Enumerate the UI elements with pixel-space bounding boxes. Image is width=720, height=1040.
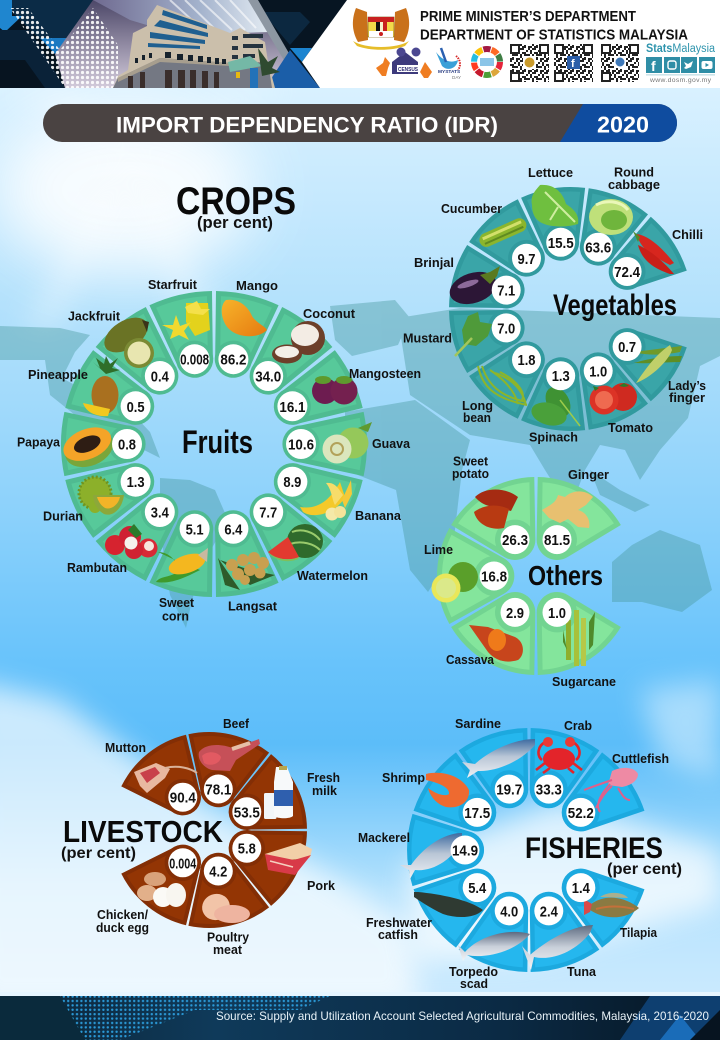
- numbers: fruits: 0.4: [151, 368, 169, 386]
- labels: fruits: Durian: [43, 509, 83, 524]
- labels: fruits: Papaya: [17, 435, 61, 450]
- labels: vegetables: Lady’s: [668, 378, 706, 393]
- labels: others: Lime: [424, 542, 453, 557]
- numbers: fruits: 3.4: [151, 504, 169, 522]
- numbers: fruits: 5.1: [186, 521, 204, 538]
- labels: vegetables: [403, 165, 706, 445]
- icon: cassava: [469, 625, 523, 662]
- labels: fisheries: scad: [460, 976, 488, 991]
- labels: fisheries: Cuttlefish: [612, 751, 669, 766]
- icon: guava: [322, 422, 372, 464]
- numbers: fisheries: 14.9: [452, 842, 478, 860]
- labels: vegetables: Spinach: [529, 430, 578, 445]
- icon: coconut: [272, 321, 325, 364]
- logo: mystats day: [436, 48, 461, 80]
- icon: catfish: [414, 892, 483, 917]
- icon: crab: [536, 737, 582, 773]
- icon: tuna: [522, 925, 593, 970]
- labels: vegetables: cabbage: [608, 177, 660, 192]
- numbers: vegetables: 0.7: [618, 339, 636, 356]
- header title text: DEPARTMENT OF STATISTICS MALAYSIA: [420, 26, 688, 44]
- labels: others: Cassava: [446, 652, 495, 667]
- icon: pork: [265, 843, 312, 875]
- labels: vegetables: Long: [462, 398, 493, 413]
- heading: fisheries: (per cent): [607, 861, 682, 878]
- numbers: others: 16.8: [481, 568, 507, 586]
- labels: fruits: [17, 277, 421, 624]
- title bar: 2020: [597, 112, 649, 138]
- icon: lettuce: [532, 185, 578, 226]
- labels: others: potato: [452, 466, 489, 481]
- logo: census: [376, 48, 432, 78]
- numbers: fisheries: 19.7: [496, 782, 522, 799]
- labels: fruits: Coconut: [303, 306, 356, 321]
- labels: fisheries: Freshwater: [366, 915, 432, 930]
- panel: livestock wheel: [61, 716, 340, 957]
- logo: mystats day: DAY: [452, 75, 461, 80]
- numbers: vegetables: [497, 235, 641, 385]
- icon: brinjal: [446, 266, 500, 310]
- icon: langsat: [218, 552, 275, 590]
- numbers: vegetables: 63.6: [585, 240, 611, 257]
- labels: fruits: Banana: [355, 508, 402, 523]
- header title text: PRIME MINISTER’S DEPARTMENT: [420, 8, 636, 25]
- labels: livestock: meat: [213, 942, 243, 957]
- icon: spinach: [529, 383, 580, 429]
- icon: mustard: [455, 312, 492, 356]
- numbers: livestock: 78.1: [205, 782, 231, 798]
- footer band: [0, 992, 720, 1040]
- labels: livestock: Fresh: [307, 770, 340, 785]
- numbers: fisheries: 1.4: [572, 880, 590, 897]
- panel: vegetables wheel: [403, 165, 706, 445]
- QR codes: f: [571, 58, 575, 70]
- numbers: fisheries: 33.3: [536, 782, 562, 799]
- StatsMalaysia social block: f: [651, 58, 656, 74]
- heading: crops: (per cent): [197, 214, 273, 232]
- labels: vegetables: bean: [463, 410, 491, 425]
- world map: [0, 300, 720, 628]
- header title text: [420, 8, 688, 44]
- numbers: livestock: 5.8: [238, 841, 256, 858]
- icon: cucumber: [477, 216, 529, 249]
- numbers: fisheries: 52.2: [568, 805, 594, 822]
- values: others: [480, 525, 572, 627]
- QR codes: [510, 44, 639, 82]
- numbers: vegetables: 7.1: [497, 283, 515, 300]
- icon: sweet corn: [156, 548, 208, 583]
- icon: cuttlefish: [584, 768, 638, 812]
- values: fruits: [112, 344, 316, 544]
- labels: vegetables: Cucumber: [441, 201, 502, 216]
- labels: fisheries: Tuna: [567, 964, 597, 979]
- icon: sweet potato: [474, 490, 518, 529]
- icon: fresh milk: [264, 766, 293, 819]
- numbers: fruits: 1.3: [127, 474, 145, 491]
- labels: fruits: Starfruit: [148, 277, 198, 292]
- StatsMalaysia social block: StatsMalaysia: [646, 43, 716, 55]
- labels: fruits: Langsat: [228, 599, 278, 614]
- labels: fisheries: catfish: [378, 927, 418, 942]
- numbers: livestock: 90.4: [170, 790, 196, 807]
- labels: fruits: Jackfruit: [68, 309, 121, 324]
- labels: fisheries: Sardine: [455, 716, 501, 731]
- icon: lime: [432, 562, 478, 602]
- labels: vegetables: Brinjal: [414, 255, 454, 270]
- values: fisheries: [450, 775, 595, 925]
- labels: livestock: duck egg: [96, 920, 149, 935]
- labels: fisheries: Shrimp: [382, 770, 425, 785]
- logo: census: CENSUS: [398, 67, 419, 73]
- numbers: fisheries: [452, 782, 594, 920]
- heading: crops: CROPS: [176, 180, 296, 223]
- heading: fruits: Fruits: [182, 424, 253, 460]
- icon: eggs: [137, 872, 186, 907]
- numbers: fisheries: 17.5: [464, 805, 490, 822]
- numbers: livestock: 0.004: [169, 855, 197, 872]
- numbers: fruits: 7.7: [259, 504, 277, 522]
- labels: vegetables: finger: [669, 390, 705, 405]
- heading: livestock: [61, 814, 224, 862]
- labels: fruits: Mangosteen: [349, 366, 421, 381]
- numbers: fruits: 16.1: [279, 399, 305, 416]
- heading: fisheries: FISHERIES: [525, 832, 663, 865]
- title bar: IMPORT DEPENDENCY RATIO (IDR): [116, 112, 498, 138]
- numbers: fruits: 6.4: [224, 521, 243, 538]
- numbers: fruits: [118, 352, 314, 538]
- labels: fruits: Watermelon: [297, 568, 368, 583]
- numbers: others: 1.0: [548, 605, 566, 622]
- header white panel: [302, 0, 720, 88]
- icon: mackerel: [400, 833, 462, 879]
- building photo: [113, 5, 280, 88]
- background clouds: [0, 680, 720, 1010]
- labels: others: [424, 454, 616, 689]
- labels: fruits: Rambutan: [67, 560, 127, 575]
- numbers: livestock: [169, 782, 260, 880]
- numbers: fruits: 86.2: [220, 352, 246, 369]
- logo: mystats day: MYSTATS: [438, 69, 461, 75]
- icon: torpedo scad: [458, 932, 530, 961]
- labels: livestock: Beef: [223, 716, 250, 731]
- values: vegetables: [492, 228, 642, 390]
- numbers: others: [481, 532, 570, 622]
- labels: fisheries: [358, 716, 669, 991]
- labels: vegetables: Tomato: [608, 420, 653, 435]
- numbers: vegetables: 1.3: [552, 368, 570, 385]
- labels: vegetables: Chilli: [672, 227, 703, 242]
- labels: livestock: Poultry: [207, 930, 250, 945]
- labels: fisheries: Mackerel: [358, 830, 410, 845]
- panel: others wheel: [424, 454, 627, 689]
- labels: livestock: Pork: [307, 878, 336, 893]
- numbers: livestock: 53.5: [234, 804, 260, 821]
- StatsMalaysia social block: [646, 43, 716, 84]
- source text: Source: Supply and Utilization Account Selected Agricultural Commodities, Malaysia, 2016-2020: [216, 1009, 709, 1023]
- numbers: others: 2.9: [506, 605, 524, 622]
- numbers: vegetables: 72.4: [614, 264, 641, 281]
- labels: livestock: Mutton: [105, 740, 146, 755]
- icon: starfruit: [162, 301, 210, 340]
- icon: poultry meat: [198, 890, 250, 924]
- icon: watermelon: [268, 524, 323, 561]
- labels: others: Sweet: [453, 454, 489, 469]
- labels: others: Sugarcane: [552, 674, 616, 689]
- labels: fisheries: Crab: [564, 718, 592, 733]
- values: livestock: [168, 774, 261, 886]
- icon: jackfruit: [98, 310, 154, 368]
- logo: SDG wheel: [474, 49, 500, 75]
- title bar: [43, 104, 677, 142]
- heading: vegetables: Vegetables: [553, 289, 677, 322]
- icon: rambutan: [105, 524, 158, 559]
- icon: cassava slice: [488, 629, 506, 651]
- numbers: vegetables: 7.0: [497, 320, 515, 337]
- icon: chilli: [633, 231, 674, 274]
- icon: long bean: [478, 366, 527, 405]
- panel: fisheries wheel: [358, 716, 682, 991]
- numbers: others: 81.5: [544, 532, 570, 549]
- icon: papaya: [58, 421, 119, 474]
- icon: sardine: [462, 739, 535, 778]
- labels: vegetables: Lettuce: [528, 165, 573, 180]
- icon: mangosteen: [312, 376, 358, 404]
- icon: mango: [222, 300, 267, 336]
- crest: coat of arms: [353, 3, 409, 50]
- icon: shrimp: [426, 773, 469, 807]
- labels: livestock: Chicken/: [97, 907, 148, 922]
- numbers: fruits: 8.9: [283, 474, 301, 491]
- numbers: fruits: 10.6: [288, 436, 314, 454]
- labels: fruits: corn: [162, 609, 189, 624]
- heading: livestock: LIVESTOCK: [63, 814, 224, 849]
- labels: fisheries: Tilapia: [620, 925, 658, 940]
- numbers: fisheries: 5.4: [468, 880, 487, 897]
- icon: sugarcane: [563, 610, 595, 666]
- numbers: vegetables: 1.8: [518, 352, 536, 369]
- numbers: vegetables: 15.5: [548, 235, 574, 252]
- labels: fruits: Guava: [372, 436, 411, 451]
- numbers: vegetables: 9.7: [518, 251, 536, 268]
- labels: vegetables: Mustard: [403, 331, 452, 346]
- numbers: livestock: 4.2: [209, 864, 227, 880]
- numbers: fruits: 34.0: [255, 368, 281, 386]
- numbers: fruits: 0.8: [118, 436, 136, 454]
- icon: durian: [79, 477, 124, 515]
- panel: fruits wheel: [17, 277, 421, 624]
- numbers: fruits: 0.008: [180, 352, 209, 369]
- numbers: fisheries: 2.4: [540, 903, 558, 920]
- numbers: fruits: 0.5: [127, 399, 145, 416]
- icon: lady's finger: [633, 345, 682, 383]
- icon: pineapple: [83, 356, 120, 416]
- icon: tomato: [590, 383, 637, 414]
- labels: livestock: [96, 716, 340, 957]
- labels: vegetables: Round: [614, 165, 654, 180]
- labels: livestock: milk: [312, 783, 338, 798]
- icon: ginger: [542, 491, 593, 528]
- icon: mutton: [134, 763, 197, 793]
- StatsMalaysia social block: www.dosm.gov.my: [649, 77, 712, 84]
- icon: banana: [300, 480, 352, 520]
- labels: fruits: Pineapple: [28, 367, 88, 382]
- icon: round cabbage: [589, 199, 633, 235]
- heading: livestock: (per cent): [61, 845, 136, 862]
- icon: tilapia: [584, 893, 639, 917]
- header banner photo: [0, 0, 347, 88]
- labels: others: Ginger: [568, 467, 609, 482]
- labels: fisheries: Torpedo: [449, 964, 498, 979]
- numbers: fisheries: 4.0: [500, 903, 518, 920]
- labels: fruits: Mango: [236, 278, 278, 293]
- heading: others: Others: [528, 560, 603, 591]
- labels: fruits: Sweet: [159, 595, 195, 610]
- icon: beef: [199, 739, 260, 771]
- numbers: others: 26.3: [502, 532, 528, 549]
- numbers: vegetables: 1.0: [589, 363, 607, 380]
